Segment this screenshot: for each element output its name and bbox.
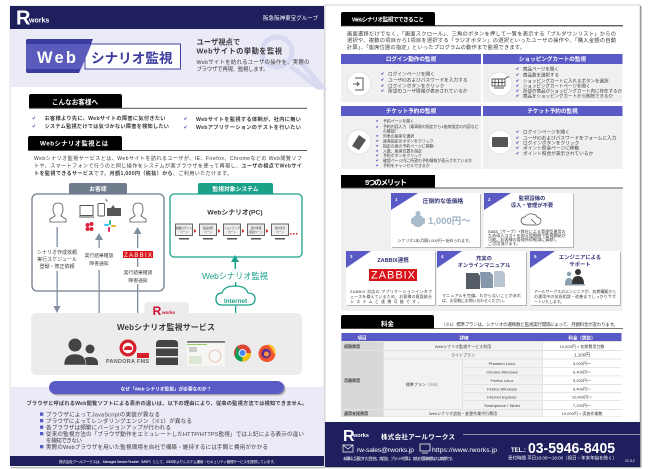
card: merit 1 low price: 圧倒的な低価格 [423,197,463,205]
label: result check right: 障害通知 [128,277,148,284]
reason list: ブラウザによってJavaScriptの実装が異なる [46,410,160,418]
heading: five merits: 5つのメリット [365,178,407,187]
description paragraph: トや、スマートフォンで行うのと同じ操作をシステムが実ブラウザを使って再現し、ユーザの視点でWebサイ [34,162,302,170]
icon: mail [343,445,353,452]
panel: ticket reservation monitoring right: ユーザIDおよびパスワードをフォームに入力 [523,134,617,142]
footer strip [10,456,324,466]
logo: Pandora FMS: PANDORA FMS [106,359,149,365]
panel: shopping cart monitoring: 商品ページを開く [523,66,559,72]
footer: company contact: 株式会社アールワークス [381,432,455,441]
table: pricing: 5,000円～ [573,361,591,366]
panel: ticket reservation monitoring right [483,106,622,169]
icon: piggy bank [411,211,425,227]
reason list: ブラウザによってレンダリングエンジン（※1）が異なる [46,417,192,425]
customer checklist: Webサイトを監視する体制が、社内に無い [196,115,301,123]
footer: company contact: 21.3.2 [625,459,635,463]
label: scenario request: シナリオ作成依頼 [37,249,77,256]
header bar: 阪急阪神東宝グループ [263,14,318,22]
flow: page monitors: 送付情報 [251,226,262,230]
table: pricing: Chrome Windows [486,370,518,374]
logo: Web シナリオ監視: Web [37,49,78,67]
card: merit 4 online manual: オンラインマニュアル [458,262,511,269]
logo: Rworks [16,8,49,30]
table: pricing: 詳細 [460,334,469,342]
icon: person left [50,203,66,222]
icon: Chrome [234,344,251,362]
flow: page monitors: ページ [276,230,284,234]
flow: page monitors: 商品選択 [203,226,214,230]
card: merit 5 engineer support: 5 [534,254,537,259]
heading: what is Web scenario monitoring [28,136,307,151]
label: scenario request: 実行スケジュール [37,256,77,263]
icon: Internet cloud [216,282,255,314]
label: scenario request [37,249,77,270]
label: result check right [124,269,153,284]
logo: small ZABBIX: ZABBIX [124,252,152,259]
card: merit 3 ZABBIX: 3 [350,254,353,259]
arrow: result from service right [134,227,142,313]
label: result check: 実行結果確認 [85,252,114,259]
panel: ticket reservation monitoring left: 列車の座席を選択 [383,134,414,138]
panel: shopping cart monitoring: ショッピングカートに入れるボタンを選択 [523,78,609,84]
heading: for these customers: こんなお客様へ [52,98,98,106]
panel: ticket reservation monitoring left: 座席指定のボタンをクリック [383,138,434,144]
hero band [10,29,324,87]
logo: ZABBIX: ZABBIX [371,270,416,282]
logo: Rworks footer: R [343,428,355,445]
intro paragraph: 画面遷移だけでなく、「画面スクロール」、三角のボタンを押して一覧を表示する「プルダウンリスト」からの [347,30,616,38]
arrow: result from service middle [95,233,103,313]
label: result check right: 実行結果確認 [124,269,153,276]
footer: company contact: 本資料に記載された会社名、商品名、ブランド名等は、各社の登録商標または商標です。 [343,456,455,461]
heading: what is Web scenario monitoring: Webシナリオ監視とは [40,138,109,148]
card: merit 5 engineer support: アールワークスのエンジニアが、初期構築から [534,288,616,294]
icon: devices [79,198,121,217]
table: pricing: Phantom Linux [489,361,515,366]
diagram: customer box [32,183,164,313]
customer checklist: システム監視だけでは気づかない障害を検知したい [44,122,169,130]
customer checklist: お客様より先に、Webサイトの障害に気付きたい [44,114,166,122]
icon: tickets [347,130,371,154]
panel: ticket reservation monitoring left [341,106,481,169]
flow: page monitors: ページ [204,230,212,234]
panel: ticket reservation monitoring right: ポイント照会ページに移動 [523,144,579,152]
logo: Rworks service: works [161,310,176,315]
heading: what Web scenario monitoring can do: Webシナリオ監視でできること [352,16,424,24]
footer: company contact: 03-5946-8405 [528,441,615,457]
icon: red chat logo [86,222,94,231]
panel: ticket reservation monitoring left: 予約ボタンをクリック [383,153,422,158]
table: pricing: 標準プラン（※1） [406,381,440,387]
table: pricing [341,333,622,417]
flow: page monitors: ページ [180,230,188,234]
table: pricing: Firefox Linux [491,378,513,383]
heading: for these customers [29,94,307,109]
table: pricing: 6,400円～ [573,370,591,374]
heading: what Web scenario monitoring can do [341,12,623,26]
panel: ticket reservation monitoring left: の確認） [383,128,399,134]
label: scenario request: 登録・修正依頼 [39,263,75,270]
icon: documents [466,271,505,289]
panel: shopping cart monitoring: 商品をショッピングカートから削除できるか [523,92,613,100]
card: merit 2 no equipment [484,193,574,248]
footer: company contact: rw-sales@rworks.jp [357,447,414,454]
footer: company contact: TEL.: [511,448,526,454]
table: pricing: 6,400円～ [573,386,591,392]
logo: Web シナリオ監視: シナリオ監視 [91,50,173,66]
card: merit 4 online manual: 4 [441,254,444,259]
label: result check: 障害通知 [89,260,109,267]
logo: Rworks footer [343,428,369,445]
diagram: monitored system box [170,183,302,257]
panel: shopping cart monitoring: 所望の商品がショッピングカート内に存在するか [523,88,622,94]
icon: monitor [420,444,430,453]
card: merit 4 online manual: マニュアルを完備。わからないことがあれ [442,292,521,298]
table: pricing: 項目 [358,336,366,342]
header bar [10,6,324,30]
panel: ticket reservation monitoring left: 人数、座席位置を指定 [383,148,422,154]
table: pricing: 10,400円～ [572,394,592,400]
icon: point card [488,130,512,154]
customer checklist [32,114,301,131]
panel: ticket reservation monitoring left: 予約ページを開く [383,118,414,124]
hero description: ブラウザで再現、監視します。 [196,65,268,73]
banner: why Web scenario monitoring: なぜ「Web シナリオ監視」が必要なのか？ [121,386,211,392]
heading: pricing [341,315,623,329]
table: pricing: 1,100円 [574,352,590,358]
reason list: を検知できない [46,436,82,444]
description paragraph [34,155,302,177]
panel: ticket reservation monitoring left: チケット予約の監視 [386,107,437,115]
hero headline: ユーザ視点で [196,38,240,46]
panel: shopping cart monitoring: 商品数を選択する [523,72,559,78]
logo: Pandora FMS [106,340,149,365]
table: pricing: 7,200円～ [573,403,591,408]
flow: page monitors: 複数ログイン [176,226,192,230]
table: pricing: 月額費用 [344,377,360,383]
reason list: 実際のWebブラウザを用いた監視環境を自社で構築・維持するには手間と費用がかかる [46,443,268,451]
icon: engineers [565,269,585,286]
icon: magnifier watermark [262,37,322,87]
flow: page monitors [176,224,298,240]
card: merit 2 no equipment: 2 [488,197,491,202]
table: pricing: 運用支援費用 [344,410,368,416]
icon: server stack [156,340,178,365]
diagram: monitored system box: Webシナリオ(PC) [207,208,263,216]
panel: login monitoring: 所望のユーザ情報が表示されているか [388,88,468,94]
panel: login monitoring: ログインページを開く [388,70,435,78]
table: pricing: Webシナリオ監視サービス利用 [435,343,491,349]
logo: Web シナリオ監視 [26,39,180,73]
panel: merits background [341,188,622,311]
panel: ticket reservation monitoring left: 予約内容入力（乗車駅の指定から1座席指定の内容など [383,124,479,129]
card: merit 1 low price [391,193,481,248]
card: merit 4 online manual: ば、お気軽にお問い合わせください。 [442,297,507,303]
logo: Rworks service: R [153,304,162,318]
hero description: Webサイトを訪れるユーザの操作を、実際の [196,58,310,66]
icon: Internet cloud: Internet [224,298,248,305]
screenshot: dashboard [187,341,225,366]
reason list: 各ブラウザは頻繁にバージョンアップが行われる [46,424,171,432]
panel: shopping cart monitoring: ショッピングカートページを開く [523,82,590,90]
card: merit 2 no equipment: ため導入コストを抑え短期間で監視開始が [488,232,566,238]
card: merit 1 low price: 1,000円～ [428,216,471,227]
card: merit 2 no equipment: 可能。お客様の管理負荷軽減に貢献し [488,236,558,242]
card: merit 2 no equipment: 監視設備の [519,194,545,202]
table: pricing: 5,200円～ [573,378,591,383]
card: merit 4 online manual [437,251,527,306]
footer: company contact: https://www.rworks.jp [432,447,497,454]
card: merit 3 ZABBIX: ェースを備えているため、お客様の既設統合 [350,293,432,299]
logo: Rworks footer: works [352,433,369,439]
card: merit 3 ZABBIX: ZABBIX 対応の アプリケーションインタフ [350,288,432,294]
flow: page monitors: ショッピング [224,226,240,230]
panel: Web scenario monitoring service [31,302,302,375]
hero description [196,58,310,73]
icon: users [64,338,98,365]
left page [10,6,325,468]
icon: person right [130,203,146,222]
table: pricing: Webシナリオ追加・変更作業代行費用 [429,410,497,416]
table: pricing: 料金（税抜） [568,334,596,342]
label: Web scenario monitoring: Webシナリオ監視 [202,271,269,281]
table: pricing: Smartphone / Tablet [484,403,521,408]
icon: slack [105,221,115,231]
card: merit 3 ZABBIX: ZABBIX連携 [377,256,409,264]
reason list: 従来の監視方法の「ブラウザ動作をエミュレートしたHTTP/HTTPS監視」では上記による表示の違い [46,430,304,438]
footer strip: 株式会社アールワークスは、Managed Service Provider（MSP）として、2000年よりシステム運用・セキュリティ管理サービスを提供しています。 [59,459,277,464]
intro paragraph: 選択や、複数の項目から1項目を選択する「ラジオボタン」の選択といったユーザの操作や、「購入金額の自動 [347,36,616,44]
logo: Rworks: R [16,8,31,30]
card: merit 4 online manual: 充実の [476,254,492,262]
footer: company contact [325,422,640,467]
card: merit 5 engineer support [530,251,621,306]
diagram: customer box: お客様 [89,185,107,193]
panel: ticket reservation monitoring left: 確認ページ内に所望の予約情報が表示されているか [383,158,472,163]
table: pricing: Firefox Windows [487,386,517,392]
panel: ticket reservation monitoring left: 予約をキャンセルできるか [383,163,430,168]
card: merit 1 low price: シナリオ1本/月額1,000円～始められます。 [398,238,472,243]
panel: ticket reservation monitoring right: ログインボタンをクリック [523,140,580,146]
panel: login monitoring: ユーザIDおよびパスワードを入力する [388,76,468,84]
panel: shopping cart monitoring: ショッピングカートの監視 [519,55,586,63]
card: merit 5 engineer support: エンジニアによる [559,254,601,261]
panel: why needed [10,381,324,456]
description paragraph: Webシナリオ監視サービスとは、Webサイトを訪れるユーザが、IE、Firefox、Chromeなどの Web閲覧ソフ [34,155,302,162]
heading: pricing: 料金 [381,319,394,328]
card: merit 5 engineer support: の運用中の技術相談・改善までしっかりサポ [534,293,616,299]
card: merit 1 low price: 1 [395,197,398,202]
diagram: monitored system box: 監視対象システム [212,185,259,193]
logo: Rworks service [153,304,176,318]
customer checklist: Webアプリケーションのテストを行いたい [196,123,301,131]
hero headline [196,38,283,56]
panel: ticket reservation monitoring right: ポイント照会が表示されているか [523,150,593,157]
card: merit 2 no equipment: ご活用頂けます。 [488,240,520,246]
footer: company contact: 受付時間 平日10:00～18:00（祝日・年末年始を除く） [508,454,617,462]
icon: cloud with magnifier [521,214,541,225]
panel: login monitoring [341,54,481,102]
flow: page monitors: 確認ページ [249,230,263,234]
icon: shopping cart [488,72,512,96]
panel: shopping cart monitoring [483,54,622,102]
label: result check [85,252,114,267]
hero headline: Webサイトの挙動を監視 [196,46,283,56]
intro paragraph: 計算」、「座席位置の指定」といったプログラムの動作まで監視できます。 [347,43,525,51]
right page [325,5,642,468]
table: pricing: 10,000円 × 実施作業数 [562,410,602,416]
card: merit 2 no equipment: 導入・管理が不要 [511,201,554,209]
arrow: request to service [54,227,60,313]
panel: ticket reservation monitoring right: チケット予約の監視 [527,107,578,115]
card: merit 3 ZABBIX: システムと連携可能です。 [350,298,422,304]
reason list [40,410,304,451]
icon: login door [347,72,371,96]
icon: Firefox [258,344,276,362]
panel: login monitoring: ログイン動作の監視 [386,55,437,63]
banner: why Web scenario monitoring [49,381,286,396]
panel: login monitoring: ログインボタンをクリック [388,82,445,90]
heading: pricing: （※1）標準プランは、シナリオの遷移数と監視実行間隔によって、月額料金が変わります。 [441,321,618,328]
table: pricing: ライトプラン [451,352,475,358]
intro paragraph [347,30,616,51]
card: merit 2 no equipment: SaaS（サーブ）+弊社による管理型運用の [488,228,566,234]
panel: ticket reservation monitoring left: 指定の席の予約ページに移動 [383,144,434,148]
card: merit 5 engineer support: サポート [569,260,591,268]
card: merit 3 ZABBIX [346,251,436,306]
description paragraph: トを監視できるサービスです。月額1,000円（税抜）から、ご利用いただけます。 [34,170,232,177]
flow: page monitors: カート [228,230,236,234]
table: pricing: Internet Explorer [487,394,517,400]
panel: Web scenario monitoring service: Webシナリオ監視サービス [117,322,215,332]
heading: five merits [341,175,623,188]
logo: Rworks: works [28,18,49,24]
flow: page monitors: 送付受付 [275,226,286,230]
panel: ticket reservation monitoring right: ログインページを開く [523,128,570,136]
table: pricing: 10,000円 × 初期費用台数 [560,343,604,349]
arrow: teal monitoring [231,255,239,269]
card: merit 5 engineer support: ートいたします。 [534,298,564,304]
panel: why needed: ブラウザと呼ばれるWeb閲覧ソフトによる表示の違いは、以下の理由により、従来の監視方法では検知できません。 [26,399,308,407]
table: pricing: 初期費用 [344,343,360,349]
